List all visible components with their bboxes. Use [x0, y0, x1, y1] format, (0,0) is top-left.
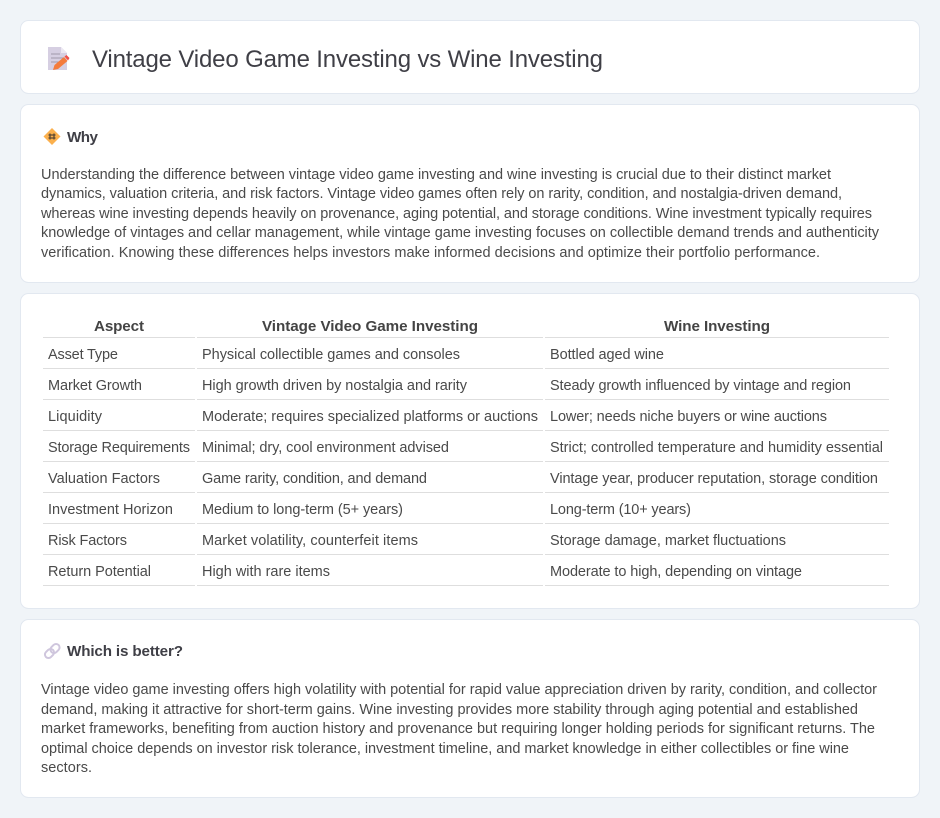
row: return potential: Return Potential: [48, 564, 151, 580]
row: return potential: Moderate to high, depending on vintage: [550, 564, 802, 580]
heading: why: Why: [67, 129, 99, 146]
table header: Aspect: [94, 318, 144, 335]
icon: chain link: [43, 642, 61, 660]
row: liquidity: Liquidity: [48, 409, 103, 425]
title: Vintage Video Game Investing vs Wine Investing: [92, 46, 603, 73]
row: investment horizon: Investment Horizon: [48, 502, 173, 518]
row: asset type: [48, 347, 664, 363]
row: storage requirements: Minimal; dry, cool environment advised: [202, 440, 449, 456]
row: investment horizon: Long-term (10+ years): [550, 502, 691, 518]
text block: which is better paragraph: sectors.: [41, 760, 92, 776]
panel: which is better: [20, 620, 920, 798]
row: storage requirements: [48, 440, 883, 456]
text block: why paragraph: dynamics, valuation criteria, and risk factors. Vintage video games often rely on rarity, condition, and nostalgia-driven demand,: [41, 186, 842, 202]
table header: Vintage Video Game Investing: [262, 318, 478, 335]
row: market growth: Steady growth influenced by vintage and region: [550, 378, 851, 394]
row: valuation factors: Valuation Factors: [48, 471, 160, 487]
text block: why paragraph: Understanding the difference between vintage video game investing and wine investing is crucial due to their distinct market: [41, 167, 831, 183]
text block: why paragraph: [40, 167, 880, 261]
table header: [94, 318, 770, 335]
row: risk factors: [48, 533, 786, 549]
row: investment horizon: Medium to long-term (5+ years): [202, 502, 403, 518]
row: return potential: High with rare items: [202, 564, 330, 580]
row: liquidity: Lower; needs niche buyers or wine auctions: [550, 409, 827, 425]
row: asset type: Bottled aged wine: [550, 347, 664, 363]
row: risk factors: Risk Factors: [48, 533, 127, 549]
row: liquidity: [48, 409, 827, 425]
row: risk factors: Market volatility, counterfeit items: [202, 533, 418, 549]
row: investment horizon: [48, 502, 691, 518]
icon: orange diamond: [44, 128, 60, 145]
row: asset type: Physical collectible games and consoles: [202, 347, 460, 363]
row: valuation factors: [48, 471, 878, 487]
row: storage requirements: Strict; controlled temperature and humidity essential: [550, 440, 883, 456]
panel: header: [20, 20, 920, 94]
icon: document with pencil: [48, 47, 70, 70]
text block: which is better paragraph: market frameworks, benefiting from auction history and provenance but requiring longer holding periods for significant returns. The: [41, 721, 875, 737]
row: liquidity: Moderate; requires specialized platforms or auctions: [202, 409, 538, 425]
panel: comparison table: [20, 294, 920, 608]
text block: which is better paragraph: [41, 682, 877, 776]
heading: which is better: Which is better?: [67, 643, 183, 660]
row: return potential: [48, 564, 802, 580]
row: storage requirements: Storage Requirements: [48, 440, 190, 456]
row: market growth: [48, 378, 851, 394]
text block: why paragraph: verification. Knowing these differences helps investors make informed decisions and optimize their portfolio performance.: [41, 245, 820, 261]
table header: Wine Investing: [664, 318, 770, 335]
row: valuation factors: Game rarity, condition, and demand: [202, 471, 427, 487]
text block: which is better paragraph: demand, making it attractive for short-term gains. Wine investing provides more stability through aging potential and established: [41, 702, 858, 718]
text block: why paragraph: knowledge of vintages and cellar management, while vintage game investing focuses on collectible demand trends and authenticity: [41, 225, 880, 241]
row: valuation factors: Vintage year, producer reputation, storage condition: [550, 471, 878, 487]
text block: which is better paragraph: optimal choice depends on investor risk tolerance, investment timeline, and market knowledge in either collectibles or fine wine: [41, 741, 849, 757]
text block: which is better paragraph: Vintage video game investing offers high volatility with potential for rapid value appreciation driven by rarity, condition, and collector: [41, 682, 877, 698]
text block: why paragraph: whereas wine investing depends heavily on provenance, aging potential, and storage conditions. Wine investment typically requires: [40, 206, 872, 222]
panel: why: [20, 104, 920, 282]
row: market growth: Market Growth: [48, 378, 142, 394]
row: market growth: High growth driven by nostalgia and rarity: [202, 378, 468, 394]
row: asset type: Asset Type: [48, 347, 118, 363]
row: risk factors: Storage damage, market fluctuations: [550, 533, 786, 549]
